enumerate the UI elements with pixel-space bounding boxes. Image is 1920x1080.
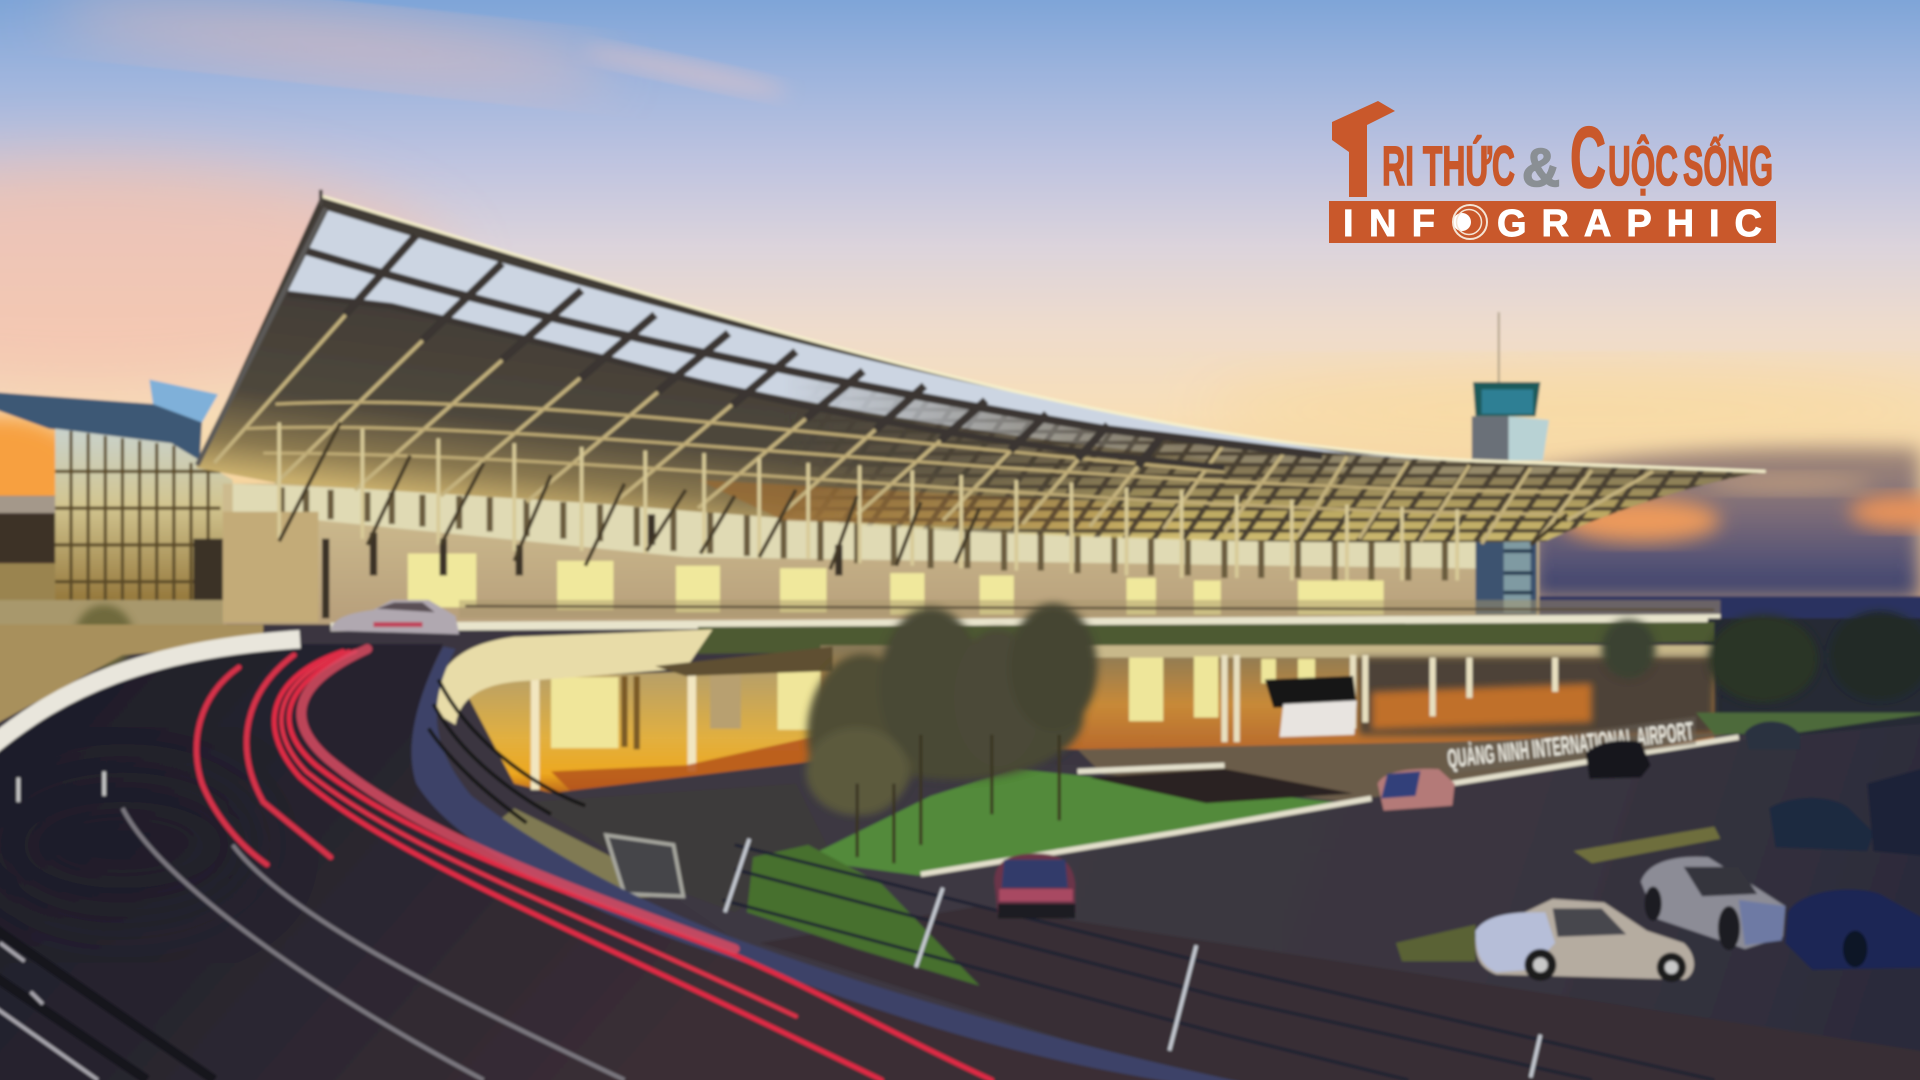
roof canopy — [196, 190, 1766, 580]
golden right soffit — [784, 373, 1766, 542]
sky — [0, 0, 1920, 612]
driveway under slab — [502, 784, 833, 912]
roadside fence — [722, 839, 1714, 1080]
car on deck — [331, 600, 459, 634]
logo banner text — [1343, 203, 1762, 245]
forecourt pavement — [1078, 732, 1739, 802]
lower level right — [698, 622, 1714, 749]
bus — [1265, 676, 1357, 737]
lower right brown road strip — [759, 906, 1920, 1080]
logo globe icon — [1453, 205, 1487, 239]
logo: Tri Thức & Cuộc Sống Infographic — [1329, 101, 1776, 245]
white curb — [921, 737, 1739, 874]
wooden soffit glow — [698, 480, 1224, 534]
strip right lawn — [1696, 713, 1920, 735]
window bays — [408, 553, 1384, 615]
car: red front — [994, 853, 1075, 918]
car: pink rear — [1378, 769, 1455, 811]
skylight band — [288, 211, 1592, 480]
highway — [0, 644, 1224, 1080]
bottom left railing — [0, 928, 214, 1080]
trees — [75, 604, 1920, 863]
lane markings — [18, 771, 624, 1080]
columns and struts — [279, 422, 1567, 580]
roof underside — [196, 196, 1766, 542]
ground base — [0, 618, 1920, 1080]
logo banner text: GRAPHIC — [1497, 203, 1762, 245]
logo wordmark: SỐNG — [1683, 134, 1773, 197]
ground behind trees at right — [1690, 618, 1920, 735]
blue parapet — [412, 647, 1243, 1080]
upper deck — [331, 600, 1720, 634]
balustrade on curve — [429, 680, 585, 823]
logo wordmark: UỘC — [1608, 134, 1678, 197]
blue glass stair tower — [1476, 527, 1537, 615]
logo T mark — [1332, 101, 1395, 197]
car: dark blue parked — [1785, 890, 1920, 970]
clouds and horizon — [1531, 447, 1920, 658]
glazing band — [233, 484, 1537, 580]
upper lawn — [802, 769, 1335, 876]
control tower — [1472, 312, 1549, 460]
dark pillars — [326, 514, 839, 618]
dark planter — [1090, 769, 1353, 803]
lower level curved section — [431, 629, 833, 802]
logo banner — [1329, 201, 1776, 243]
cream curved slab — [431, 629, 713, 725]
logo wordmark: RI THỨC — [1382, 134, 1515, 197]
logo wordmark — [1382, 110, 1773, 206]
parking lot — [527, 722, 1920, 1080]
red light trails — [196, 649, 992, 1080]
roof edges — [321, 196, 1766, 471]
logo wordmark: & — [1522, 138, 1560, 198]
terminal facade — [223, 484, 1539, 624]
shadow on road — [0, 771, 257, 918]
lower lawn — [747, 845, 980, 986]
car: silver coupe — [1476, 899, 1694, 982]
tan ribs — [214, 235, 1653, 544]
left wall block — [223, 512, 318, 622]
car: silver suv — [1641, 857, 1785, 950]
car: black — [1586, 740, 1651, 779]
airport sign — [1445, 716, 1696, 774]
left ground — [0, 624, 263, 729]
white barrier — [0, 639, 300, 747]
car: dark far right — [1745, 722, 1920, 857]
logo wordmark: C — [1570, 110, 1606, 206]
longitudinal ribs — [245, 402, 1592, 514]
dark skylight beams — [306, 235, 1322, 467]
logo banner text: INF — [1343, 203, 1435, 245]
parked planters — [1396, 827, 1720, 961]
left glass building — [0, 380, 233, 631]
